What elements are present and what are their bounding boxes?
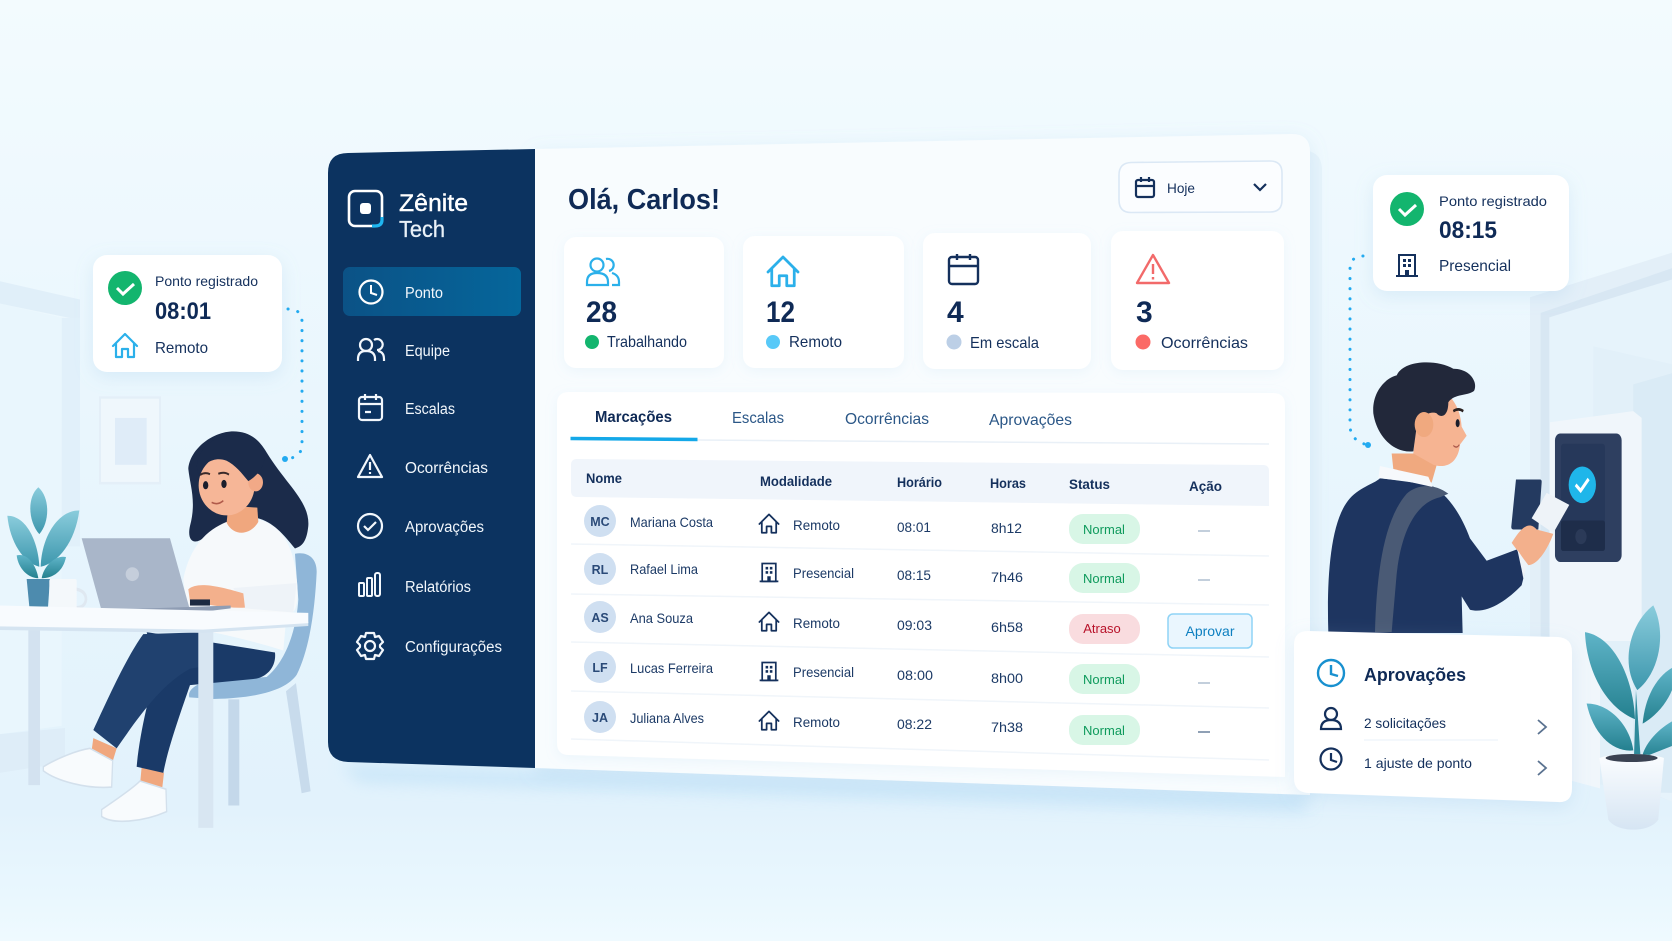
nav item: Configurações [357, 633, 502, 659]
row: Lucas Ferreira [584, 651, 1210, 694]
row: Ana Souza [584, 601, 1252, 648]
row: Lucas Ferreira: Presencial [793, 664, 854, 680]
tabs: Escalas [732, 410, 784, 427]
card reader [1555, 433, 1622, 562]
card: aprovações: 1 ajuste de ponto [1364, 755, 1472, 771]
table header: Horas [990, 475, 1026, 491]
man [1328, 362, 1569, 633]
table panel [557, 392, 1285, 777]
panel floor shadow [340, 765, 1310, 812]
stat card: Remoto: Remoto [789, 334, 842, 351]
stat card: Em escala: 4 [947, 296, 964, 329]
table header: Ação [1189, 478, 1222, 494]
row: Lucas Ferreira: Normal [1083, 672, 1125, 687]
row: Ana Souza: Ana Souza [630, 610, 693, 626]
row: Mariana Costa: Remoto [793, 517, 840, 533]
nav item: Ocorrências: Ocorrências [405, 460, 488, 477]
connector: right dotted [1350, 256, 1371, 448]
date dropdown: Hoje [1167, 180, 1195, 196]
row: Juliana Alves: Remoto [793, 714, 840, 730]
row: Lucas Ferreira: LF [592, 661, 608, 675]
stat card: Ocorrências [1111, 231, 1284, 370]
row: Ana Souza: 6h58 [991, 619, 1023, 635]
nav item: Escalas: Escalas [405, 401, 455, 418]
greeting heading: Olá, Carlos! [568, 184, 720, 216]
table header: Horário [897, 474, 942, 490]
logo: Tech [399, 216, 445, 242]
nav item: Ocorrências [358, 455, 488, 477]
row: Rafael Lima: Normal [1083, 571, 1125, 586]
stat card: Em escala [923, 233, 1091, 369]
nav item: Ponto (active) [343, 267, 521, 316]
row: Juliana Alves: 7h38 [991, 719, 1023, 735]
stat card: Em escala: Em escala [970, 335, 1039, 352]
logo: Zênite [399, 190, 468, 217]
tabs [570, 409, 1269, 444]
stat card: Trabalhando: 28 [586, 296, 617, 329]
wall picture [100, 397, 160, 483]
row: Ana Souza: AS [591, 611, 609, 625]
nav item: Relatórios [359, 573, 471, 596]
row: Rafael Lima: Presencial [793, 565, 854, 581]
stat card: Ocorrências: Ocorrências [1161, 335, 1248, 352]
icon: check [1390, 192, 1424, 226]
row: Ana Souza: 09:03 [897, 617, 932, 633]
laptop [82, 538, 231, 612]
nav item: Configurações: Configurações [405, 639, 502, 656]
row: Lucas Ferreira: Lucas Ferreira [630, 660, 713, 676]
date dropdown [1119, 161, 1282, 212]
row: Lucas Ferreira: 8h00 [991, 670, 1023, 686]
row: Rafael Lima: 08:15 [897, 567, 931, 583]
right room door and wall [1530, 253, 1672, 802]
left room window [0, 281, 160, 773]
stat card: Trabalhando: Trabalhando [607, 334, 687, 351]
tabs: Ocorrências [845, 411, 929, 428]
row: Rafael Lima: Rafael Lima [630, 561, 698, 577]
row: Rafael Lima: RL [592, 563, 609, 577]
desk [0, 606, 308, 828]
tabs: Aprovações [989, 412, 1072, 429]
row: Mariana Costa: Normal [1083, 522, 1125, 537]
card: ponto registrado 08:15: Ponto registrado [1439, 193, 1547, 209]
row: Ana Souza: Remoto [793, 615, 840, 631]
card: ponto registrado 08:01: Remoto [155, 340, 208, 357]
row: Rafael Lima: 7h46 [991, 569, 1023, 585]
plant [7, 487, 79, 607]
row: Juliana Alves: Normal [1083, 723, 1125, 738]
row: Juliana Alves [584, 701, 1210, 745]
card: ponto registrado 08:01 [93, 255, 282, 372]
logo [349, 190, 468, 242]
row: Mariana Costa: MC [590, 515, 610, 529]
nav item: Equipe [358, 339, 450, 361]
chair [189, 553, 317, 805]
stat card: Remoto: 12 [766, 296, 795, 329]
approve button: Aprovar [1185, 623, 1235, 639]
card: ponto registrado 08:01: 08:01 [155, 298, 211, 325]
row: Mariana Costa: 8h12 [991, 520, 1022, 536]
approve button [1168, 614, 1252, 648]
card: aprovações: Aprovações [1364, 665, 1466, 685]
table header: Nome [586, 470, 622, 486]
row: Mariana Costa [584, 505, 1210, 544]
main panel [535, 134, 1310, 795]
card: ponto registrado 08:15: 08:15 [1439, 217, 1497, 244]
nav item: Relatórios: Relatórios [405, 579, 471, 596]
row: Lucas Ferreira: 08:00 [897, 667, 933, 683]
tabs: Marcações [595, 409, 672, 426]
mug [49, 579, 86, 610]
illustration: man at reader [1328, 362, 1672, 830]
stat card: Trabalhando [564, 237, 724, 368]
row: Mariana Costa: Mariana Costa [630, 514, 713, 530]
plant [1585, 605, 1672, 830]
row: Rafael Lima [584, 553, 1210, 593]
row: Juliana Alves: Juliana Alves [630, 710, 704, 726]
nav item: Equipe: Equipe [405, 343, 450, 360]
card: ponto registrado 08:01: Ponto registrado [155, 273, 258, 289]
sidebar [328, 149, 535, 768]
stat card: Remoto [743, 236, 904, 368]
illustration: woman at desk [0, 431, 317, 828]
row: Juliana Alves: JA [592, 711, 608, 725]
person [43, 431, 308, 821]
nav item: Aprovações: Aprovações [405, 519, 484, 536]
dashboard panel [328, 134, 1310, 795]
table header: Status [1069, 476, 1110, 492]
back panel layer [1295, 150, 1322, 790]
nav item: Escalas [359, 394, 455, 420]
card: ponto registrado 08:15 [1373, 175, 1569, 291]
table header: Modalidade [760, 473, 832, 489]
row: Ana Souza: Atraso [1083, 621, 1121, 636]
table header [571, 459, 1269, 506]
card: ponto registrado 08:15: Presencial [1439, 258, 1511, 275]
row: Juliana Alves: 08:22 [897, 716, 932, 732]
stat card: Ocorrências: 3 [1136, 296, 1153, 329]
card: aprovações: 2 solicitações [1364, 715, 1446, 731]
row: Mariana Costa: 08:01 [897, 519, 931, 535]
connector: left dotted [282, 309, 302, 462]
card: aprovações [1294, 631, 1572, 802]
icon: check [108, 271, 142, 305]
nav item: Ponto (active): Ponto [405, 285, 443, 302]
nav item: Aprovações [358, 514, 484, 538]
